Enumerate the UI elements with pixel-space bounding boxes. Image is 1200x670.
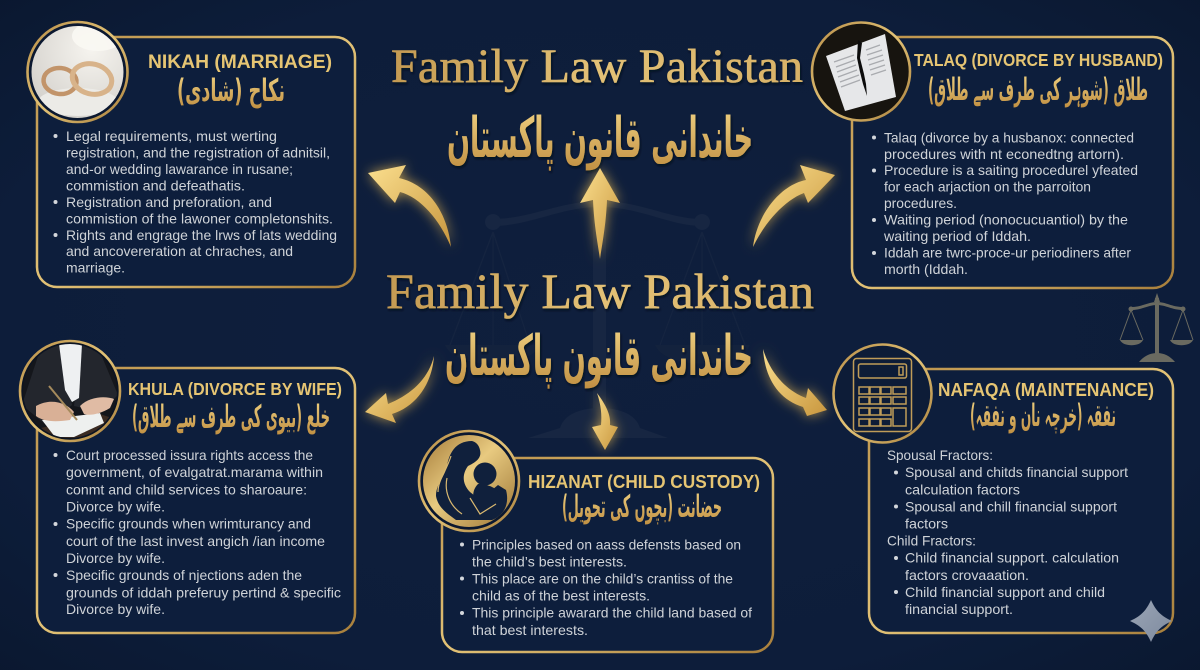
talaq bullets: Talaq (divorce by a husbanox: connected xyxy=(884,130,1134,145)
panel: hizanat: حضانت (بچوں کی تحویل) xyxy=(562,489,722,525)
arrow: down-left to khula xyxy=(365,356,434,423)
nafaqa details xyxy=(887,448,1128,617)
khula bullets: Divorce by wife. xyxy=(66,500,165,514)
icon: mother and child xyxy=(419,431,519,531)
text: خاندانی قانون پاکستان xyxy=(447,106,753,171)
watermark: scales of justice xyxy=(445,201,750,438)
icon: torn document xyxy=(812,22,910,120)
talaq bullets: Waiting period (nonocucuantiol) by the xyxy=(884,213,1128,228)
arrow: up center xyxy=(580,168,620,259)
text: خلع (بیوی کی طرف سے طلاق) xyxy=(132,399,330,435)
talaq bullets xyxy=(872,130,1138,277)
title: center english: Family Law Pakistan xyxy=(386,263,814,319)
icon: wedding rings xyxy=(28,21,128,122)
khula bullets: Divorce by wife. xyxy=(66,602,165,617)
hizanat bullets xyxy=(460,537,752,638)
nafaqa details: factors xyxy=(905,516,948,532)
icon: sparkle xyxy=(1130,600,1172,642)
arrow: up-right to talaq xyxy=(753,165,835,247)
panel: khula xyxy=(20,341,355,633)
talaq bullets: procedures with nt econedtng artorn). xyxy=(884,147,1124,162)
text: خاندانی قانون پاکستان xyxy=(445,324,753,389)
khula bullets xyxy=(54,448,341,617)
nafaqa details: Child financial support and child xyxy=(905,585,1105,600)
talaq heading: TALAQ (DIVORCE BY HUSBAND) xyxy=(914,50,1163,70)
hizanat bullets: This principle awarard the child land based of xyxy=(472,606,752,621)
nikah bullets: and-or wedding lawarance in rusane; xyxy=(66,162,293,177)
hizanat bullets: Principles based on aass defensts based on xyxy=(472,537,741,552)
panel: talaq xyxy=(812,22,1173,288)
talaq bullets: waiting period of Iddah. xyxy=(883,229,1031,244)
hizanat bullets: child as of the best interests. xyxy=(472,589,650,604)
hizanat bullets: This place are on the child’s crantiss of the xyxy=(472,572,733,586)
khula frame xyxy=(37,368,355,633)
nikah bullets: registration, and the registration of adnitsil, xyxy=(66,145,330,160)
khula bullets: Specific grounds when wrimturancy and xyxy=(66,517,311,532)
talaq bullets: Iddah are twrc-proce-ur periodiners after xyxy=(884,246,1131,260)
talaq bullets: procedures. xyxy=(884,196,957,211)
khula bullets: Divorce by wife. xyxy=(66,551,165,566)
nafaqa details: financial support. xyxy=(905,602,1013,617)
nikah frame xyxy=(37,37,355,287)
panel: nafaqa xyxy=(834,344,1173,633)
khula bullets: court of the last invest angich /ian income xyxy=(66,534,325,549)
nikah bullets xyxy=(54,129,337,276)
nafaqa details: Spousal and chitds financial support xyxy=(905,465,1128,480)
nikah bullets: Legal requirements, must werting xyxy=(66,129,277,144)
arrow: up-left to nikah xyxy=(368,165,451,247)
talaq frame xyxy=(852,37,1173,288)
nikah bullets: and ancovereration at chraches, and xyxy=(66,244,293,259)
nafaqa heading: NAFAQA (MAINTENANCE) xyxy=(938,380,1154,400)
nafaqa details: Child financial support. calculation xyxy=(905,551,1119,566)
hizanat bullets: that best interests. xyxy=(472,623,588,638)
nafaqa details: Spousal Fractors: xyxy=(887,448,993,463)
nikah bullets: Registration and preforation, and xyxy=(66,195,272,210)
nikah bullets: commistion of the lawoner completonshits. xyxy=(66,211,333,226)
nikah heading: NIKAH (MARRIAGE) xyxy=(148,51,332,73)
khula bullets: grounds of iddah preferuy pertind & specific xyxy=(66,585,341,600)
talaq bullets: morth (Iddah. xyxy=(884,262,968,277)
arrow: down to hizanat xyxy=(592,393,618,450)
small scales icon xyxy=(1120,293,1193,362)
khula bullets: conmt and child services to sharoaure: xyxy=(66,482,307,497)
khula bullets: Court processed issura rights access the xyxy=(66,448,313,463)
hizanat bullets: the child’s best interests. xyxy=(472,554,627,569)
nikah bullets: marriage. xyxy=(66,261,125,276)
arrow: down-right to nafaqa xyxy=(763,349,827,416)
hizanat heading: HIZANAT (CHILD CUSTODY) xyxy=(528,472,760,492)
icon: calculator xyxy=(834,344,932,442)
talaq bullets: for each arjaction on the parroiton xyxy=(884,180,1091,195)
talaq bullets: Procedure is a saiting procedurel yfeated xyxy=(884,163,1138,178)
panel: nikah xyxy=(28,21,355,287)
nikah bullets: commistion and defeathatis. xyxy=(66,178,245,193)
hizanat frame xyxy=(442,458,773,652)
nafaqa details: factors crovaaation. xyxy=(905,568,1029,583)
khula heading: KHULA (DIVORCE BY WIFE) xyxy=(128,379,342,399)
nikah bullets: Rights and engrage the lrws of lats wedding xyxy=(66,228,337,243)
nafaqa details: Spousal and chill financial support xyxy=(905,499,1117,514)
panel: hizanat xyxy=(419,431,773,652)
icon: woman signing xyxy=(20,341,120,445)
nikah urdu heading: نکاح (شادی) xyxy=(177,73,285,109)
nafaqa frame xyxy=(869,369,1173,633)
nafaqa details: Child Fractors: xyxy=(887,534,976,549)
title: top english: Family Law Pakistan xyxy=(391,40,803,93)
nafaqa details: calculation factors xyxy=(905,482,1020,497)
khula bullets: government, of evalgatrat.marama within xyxy=(66,465,323,480)
khula bullets: Specific grounds of njections aden the xyxy=(66,568,302,583)
